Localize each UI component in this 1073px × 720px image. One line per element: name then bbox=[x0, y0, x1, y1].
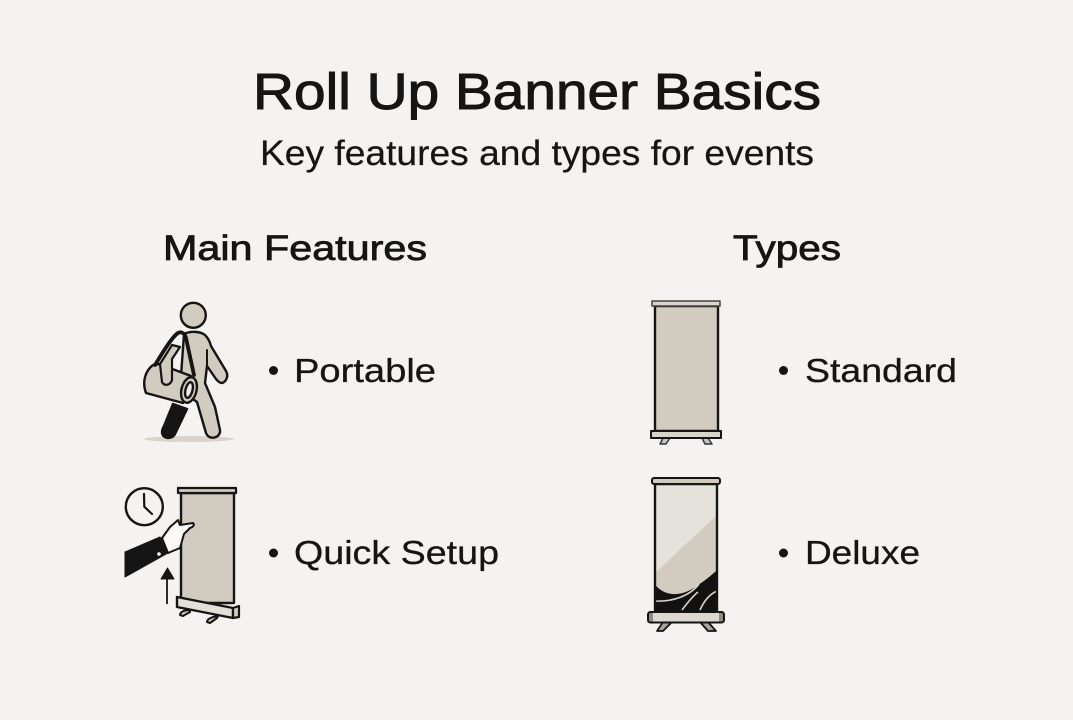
type: standard bbox=[651, 301, 957, 444]
icon: deluxe banner bbox=[648, 478, 724, 631]
subtitle: Key features and types for events bbox=[260, 134, 814, 173]
bullet bbox=[779, 366, 788, 375]
feature: portable bbox=[144, 303, 436, 442]
bullet bbox=[269, 548, 278, 558]
label: quick setup: Quick Setup bbox=[294, 534, 499, 571]
feature: quick setup bbox=[125, 488, 499, 623]
icon: person carrying banner bag bbox=[144, 303, 234, 442]
label: deluxe: Deluxe bbox=[805, 534, 920, 571]
bullet bbox=[779, 548, 788, 558]
icon: standard banner bbox=[651, 301, 721, 444]
type: deluxe bbox=[648, 478, 920, 631]
title: Roll Up Banner Basics bbox=[253, 63, 821, 120]
heading: types: Types bbox=[733, 229, 841, 268]
label: portable: Portable bbox=[294, 352, 436, 389]
heading: main features: Main Features bbox=[163, 229, 427, 268]
label: standard: Standard bbox=[805, 352, 957, 389]
icon: banner setup with clock, hand and arrow bbox=[125, 488, 239, 623]
bullet bbox=[269, 366, 278, 375]
